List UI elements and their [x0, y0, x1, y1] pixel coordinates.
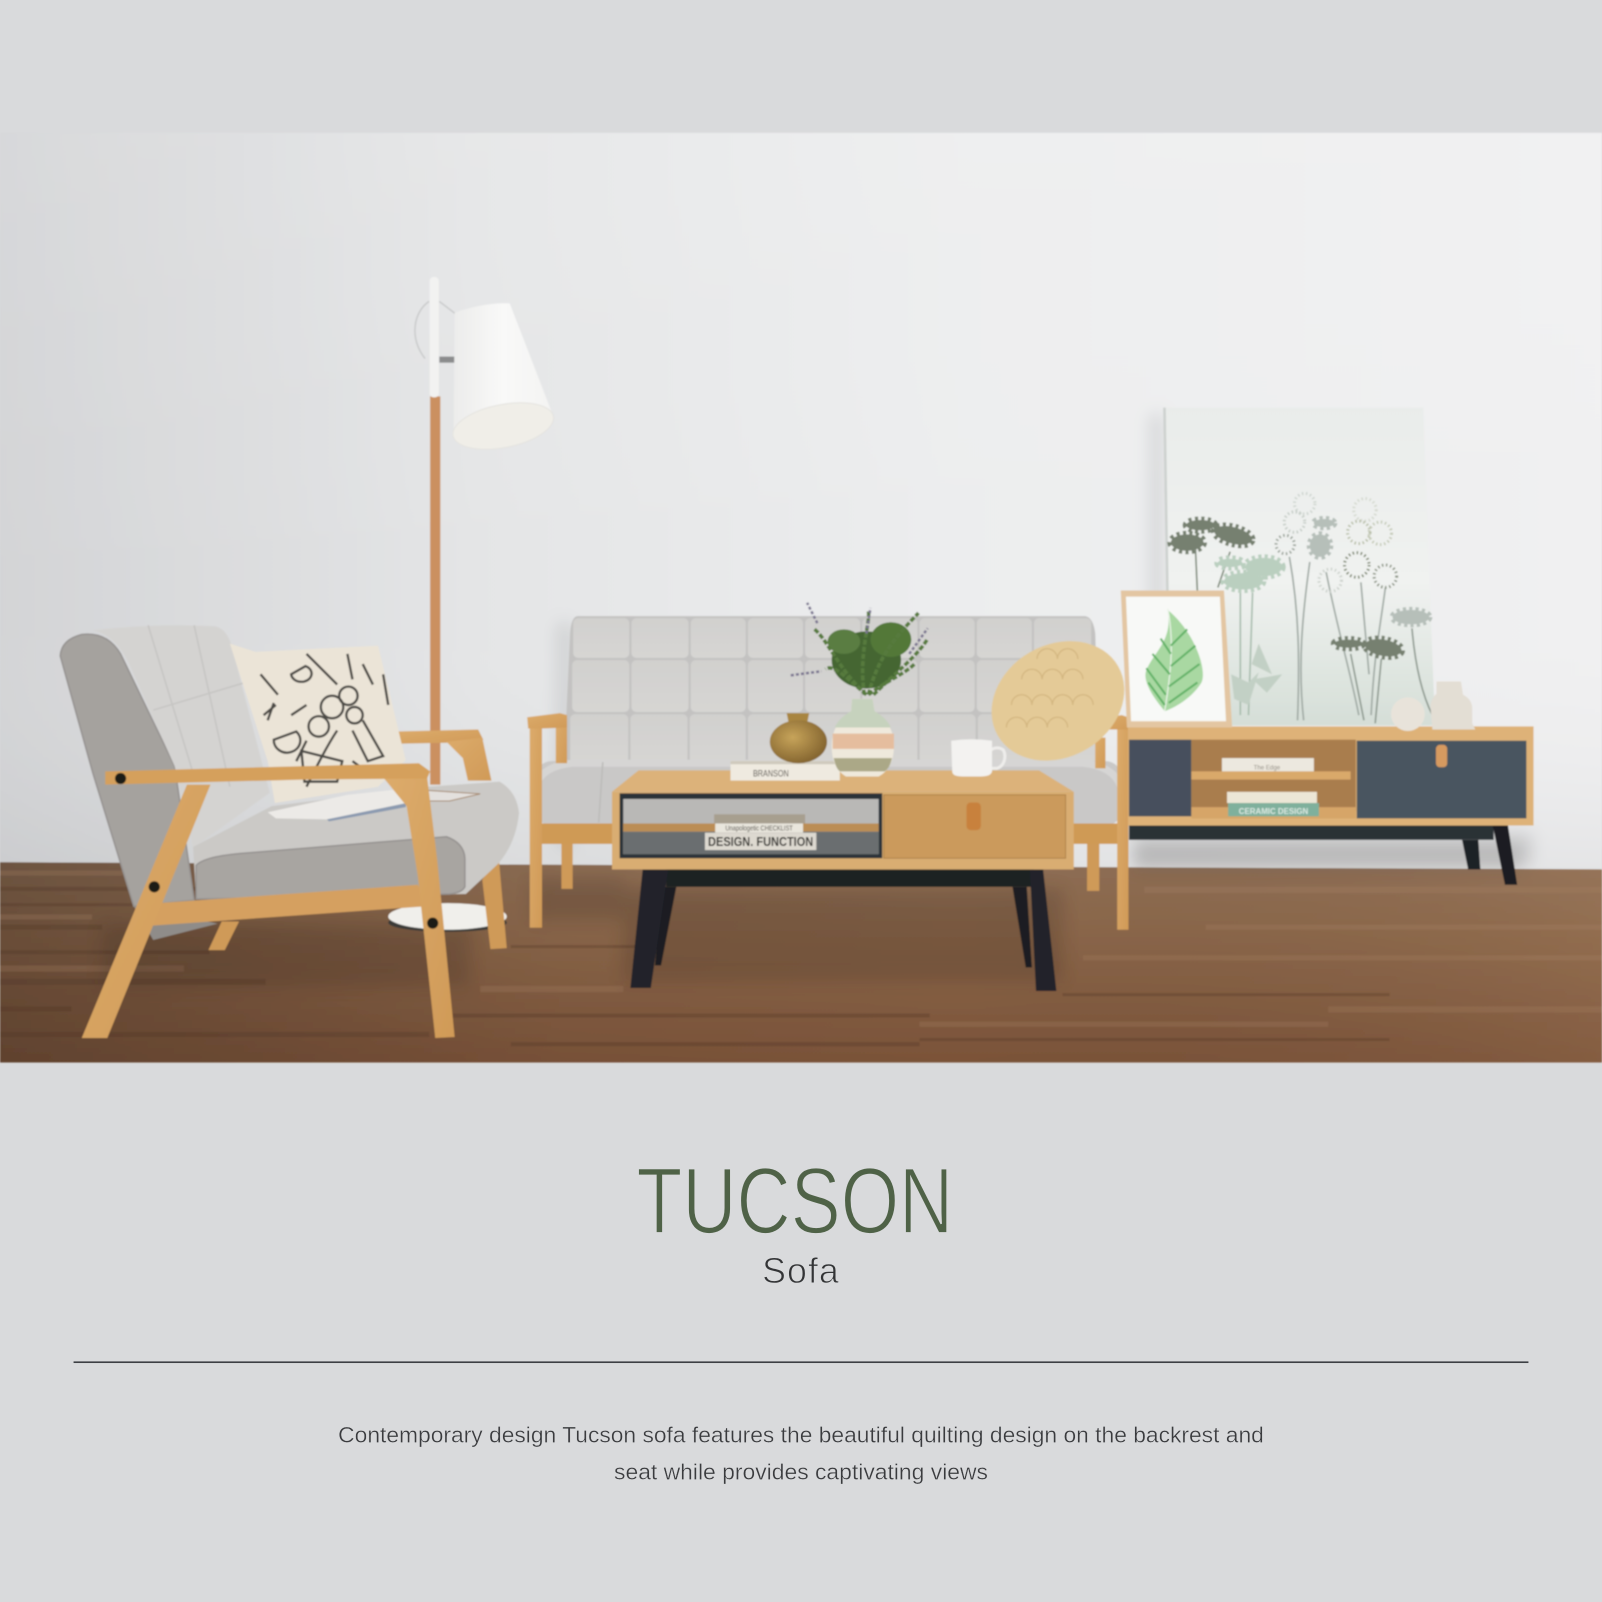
- large botanical canvas: [1163, 408, 1435, 725]
- table front legs: [630, 869, 1056, 991]
- table leather handle: [967, 803, 981, 830]
- wall: [0, 133, 1602, 868]
- chair cross bar: [152, 885, 427, 926]
- tv console: [1128, 726, 1534, 885]
- lamp white pole: [430, 277, 439, 397]
- chair back quilt seams: [148, 625, 245, 787]
- lamp base: [388, 903, 507, 932]
- chair back cushion: [93, 625, 270, 848]
- book branson: [731, 761, 840, 781]
- sofa seat: [535, 761, 1122, 826]
- console right drawer: [1357, 741, 1526, 818]
- niche book small: [714, 814, 805, 833]
- chair front right leg: [384, 776, 455, 1038]
- book branson: BRANSON: [753, 768, 789, 778]
- chair back side panel: [60, 634, 194, 906]
- floor lamp: [388, 277, 557, 932]
- table rear legs: [655, 887, 1032, 968]
- console ornaments: [1391, 681, 1475, 731]
- gold vase: [770, 713, 827, 763]
- console body: [1128, 726, 1534, 826]
- niche book small: Unapologetic CHECKLIST: [725, 825, 793, 833]
- description: seat while provides captivating views: [614, 1459, 988, 1484]
- plant: [791, 603, 928, 695]
- canvas leaves: [1231, 644, 1282, 705]
- wooden floor: [0, 862, 1602, 1063]
- striped vase: [832, 699, 894, 776]
- table stretcher: [666, 868, 1034, 887]
- chair far arm: [396, 729, 491, 781]
- console front leg: [1493, 826, 1517, 885]
- description: [338, 1423, 1264, 1484]
- bottom grey panel: [0, 1062, 1602, 1602]
- sofa back: [564, 616, 1099, 766]
- top grey band: [0, 0, 1602, 134]
- lamp clamp: [439, 357, 455, 363]
- chair seat: [193, 782, 519, 899]
- furniture shadows on floor: [102, 844, 1522, 986]
- table body: [612, 792, 1074, 869]
- floral pillow: [230, 644, 406, 803]
- lower books: [1227, 792, 1319, 816]
- chair near arm: [105, 763, 430, 785]
- table open niche: [620, 793, 882, 858]
- ceramic ball: [1391, 697, 1425, 731]
- description: Contemporary design Tucson sofa features the beautiful quilting design on the backrest and: [338, 1423, 1264, 1448]
- divider line: [74, 1361, 1528, 1363]
- wall shadow behind furniture: [557, 414, 1533, 863]
- product title: TUCSON: [637, 1148, 953, 1253]
- niche book design function: DESIGN. FUNCTION: [708, 834, 813, 849]
- console under frame: [1129, 823, 1494, 840]
- sofa lower frame: [535, 823, 1122, 844]
- canvas grey flowers: [1310, 519, 1429, 624]
- round cushion: [970, 617, 1146, 784]
- open book on seat: [268, 789, 480, 821]
- console left door: [1129, 740, 1191, 816]
- print frame: [1121, 591, 1232, 727]
- upper books: The Edge: [1254, 764, 1281, 771]
- lamp shade: [454, 303, 553, 442]
- lamp shade opening: [449, 395, 557, 457]
- table top: [612, 770, 1074, 792]
- lamp cable: [415, 301, 457, 359]
- ceramic jar: [1430, 681, 1475, 729]
- chair front left leg: [82, 785, 210, 1038]
- lower books: CERAMIC DESIGN: [1239, 806, 1308, 816]
- sofa right arm: [1095, 715, 1131, 930]
- lamp wood pole: [430, 396, 440, 785]
- chair rear left leg: [208, 922, 239, 950]
- console rear leg: [1462, 840, 1480, 869]
- fern: [1145, 609, 1203, 711]
- console shelf: [1191, 771, 1351, 780]
- console leather handle: [1436, 745, 1447, 767]
- white mug: [951, 739, 1005, 776]
- sofa: [527, 616, 1146, 930]
- table drawer: [884, 795, 1066, 858]
- chair back underside: [134, 906, 218, 940]
- console niche: [1191, 740, 1356, 811]
- coffee table: [612, 603, 1074, 991]
- chair rear right leg: [482, 856, 507, 949]
- print paper: [1126, 597, 1226, 721]
- canvas mint flowers: [1218, 558, 1282, 590]
- canvas stems: [1195, 547, 1432, 723]
- product subtitle: Sofa: [762, 1251, 839, 1291]
- upper books: [1222, 758, 1314, 771]
- console lower shelf: [1191, 807, 1356, 818]
- chair bolts: [115, 773, 438, 929]
- canvas dandelions: [1276, 493, 1397, 592]
- sofa left arm: [527, 713, 567, 928]
- framed fern print: [1121, 591, 1232, 727]
- armchair: [60, 625, 519, 1038]
- canvas dark flowers: [1171, 520, 1403, 659]
- room photo: [0, 133, 1602, 1063]
- sofa rear legs: [561, 838, 1099, 891]
